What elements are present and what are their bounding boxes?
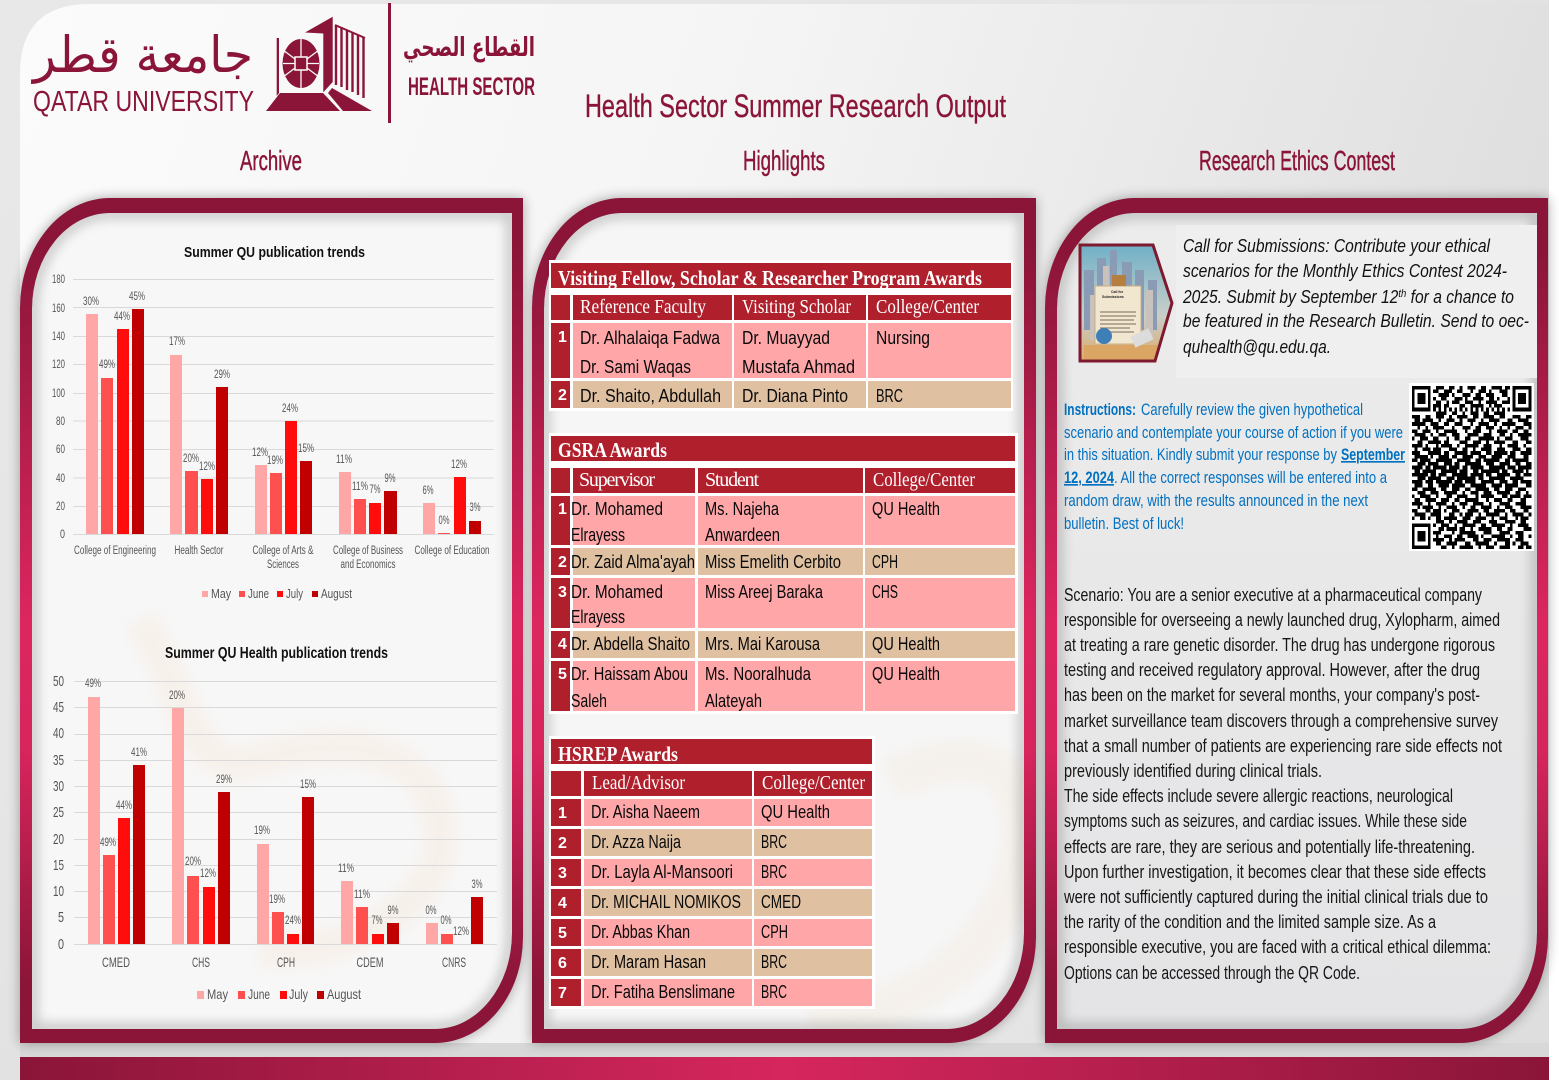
y axis labels: 0 <box>60 527 65 541</box>
table header: Visiting Scholar <box>742 296 851 318</box>
data labels: 24% <box>282 401 298 415</box>
bars: May <box>86 314 435 534</box>
y axis labels: 45 <box>53 699 64 716</box>
data labels: 12% <box>252 445 268 459</box>
table row 1: Dr. Alhalaiqa Fadwa <box>580 328 721 348</box>
y axis labels: 25 <box>53 804 64 821</box>
data labels: 45% <box>129 289 145 303</box>
text: scenario: The side effects include severe allergic reactions, neurological <box>1064 786 1453 806</box>
icon: call for submissions illustration <box>1080 245 1173 363</box>
table rows: Dr. Layla Al-Mansoori <box>591 862 733 882</box>
english health sector: HEALTH SECTOR <box>408 73 535 101</box>
text: instructions: Instructions: <box>1064 401 1136 419</box>
QR code <box>1409 383 1534 551</box>
table rows: QU Health <box>872 664 940 684</box>
heading: highlights: Highlights <box>743 145 825 176</box>
table rows: 4 <box>558 636 567 653</box>
y axis labels: 60 <box>56 442 65 456</box>
table title <box>551 739 872 766</box>
text: instructions: scenario and contemplate your course of action if you were <box>1064 424 1403 442</box>
data labels: 17% <box>169 334 185 348</box>
table row 2 <box>551 381 1011 408</box>
y axis labels: 180 <box>52 272 65 286</box>
chart title: Summer QU Health publication trends <box>165 645 388 662</box>
bars: August <box>133 765 483 944</box>
data labels: 19% <box>254 823 270 837</box>
y axis labels <box>53 673 64 953</box>
data labels: 29% <box>216 772 232 786</box>
category labels: Sciences <box>267 559 299 571</box>
legend: July <box>286 586 303 601</box>
table rows: Dr. Haissam Abou <box>571 664 688 684</box>
table rows: BRC <box>761 952 787 972</box>
data labels: 15% <box>298 441 314 455</box>
table rows: 7 <box>558 985 567 1002</box>
table header: Supervisor <box>579 469 655 491</box>
text: instructions <box>1064 401 1405 533</box>
legend: June <box>248 986 270 1002</box>
table rows: 6 <box>558 955 567 972</box>
text: instructions: bulletin. Best of luck! <box>1064 515 1184 533</box>
table rows: Dr. Mohamed <box>571 582 663 602</box>
y axis labels: 80 <box>56 414 65 428</box>
table row 2: 2 <box>558 387 567 404</box>
icon: call for submissions illustration: Submissions <box>1102 295 1124 299</box>
data labels: 19% <box>269 892 285 906</box>
table rows: Miss Emelith Cerbito <box>705 552 841 572</box>
table rows: Dr. Azza Naija <box>591 832 682 852</box>
table header: College/Center <box>762 772 865 794</box>
table rows: 4 <box>558 895 567 912</box>
table row 1: Mustafa Ahmad <box>742 357 855 377</box>
table rows: Dr. Maram Hasan <box>591 952 706 972</box>
y axis labels: 35 <box>53 752 64 769</box>
data labels: 11% <box>352 479 368 493</box>
category labels: CNRS <box>442 954 466 970</box>
data labels: 30% <box>83 294 99 308</box>
data labels: 7% <box>372 913 383 927</box>
data labels: 20% <box>183 451 199 465</box>
table header <box>551 468 1015 493</box>
table header: College/Center <box>876 296 979 318</box>
data labels: 11% <box>336 452 352 466</box>
call for submissions box <box>1176 225 1537 378</box>
text: call for submissions <box>1182 236 1529 357</box>
table rows: Dr. Fatiha Benslimane <box>591 982 735 1002</box>
text: call for submissions: th <box>1398 288 1406 300</box>
table header: Reference Faculty <box>580 296 706 318</box>
table rows: Elrayess <box>571 525 625 545</box>
logo emblem <box>266 17 372 111</box>
table rows: Elrayess <box>571 607 625 627</box>
data labels: 19% <box>267 453 283 467</box>
y axis labels: 5 <box>58 909 64 926</box>
category labels: CMED <box>102 954 130 970</box>
bars: June <box>101 378 450 534</box>
data labels: 41% <box>131 745 147 759</box>
category labels <box>102 954 466 970</box>
data labels <box>85 676 483 938</box>
table: visiting fellow, scholar and researcher program awards <box>549 260 1013 411</box>
y axis labels: 40 <box>56 471 65 485</box>
y axis labels: 40 <box>53 725 64 742</box>
heading: archive: Archive <box>240 145 302 176</box>
data labels: 9% <box>388 903 399 917</box>
health sector label <box>403 33 535 101</box>
y axis labels: 100 <box>52 386 65 400</box>
legend: July <box>289 986 308 1002</box>
category labels: CPH <box>277 954 295 970</box>
text: scenario: Options can be accessed through the QR Code. <box>1064 963 1360 983</box>
table rows: BRC <box>761 982 787 1002</box>
table rows: 2 <box>558 554 567 571</box>
table rows: Ms. Najeha <box>705 499 780 519</box>
table rows: QU Health <box>872 499 940 519</box>
panel frame: archive <box>20 198 523 1043</box>
table rows: 3 <box>558 865 567 882</box>
table rows: Dr. Abbas Khan <box>591 922 690 942</box>
data labels: 6% <box>422 483 434 497</box>
table rows: Dr. MICHAIL NOMIKOS <box>591 892 741 912</box>
table rows: CMED <box>761 892 801 912</box>
table rows <box>551 496 1015 711</box>
category labels: College of Arts & <box>252 545 314 557</box>
text: instructions: random draw, with the results announced in the next <box>1064 492 1368 510</box>
table rows: QU Health <box>761 802 830 822</box>
text: instructions: . All the correct responses will be entered into a <box>1114 469 1388 487</box>
y axis labels: 140 <box>52 329 65 343</box>
data labels: 3% <box>472 877 483 891</box>
table row 1: Nursing <box>876 328 930 348</box>
text: call for submissions: quhealth@qu.edu.qa. <box>1183 337 1331 357</box>
bars: July <box>117 329 466 534</box>
y axis labels: 20 <box>53 831 64 848</box>
table row 1: Dr. Muayyad <box>742 328 830 348</box>
table header: Lead/Advisor <box>592 772 685 794</box>
table row 2: BRC <box>876 386 903 406</box>
category labels: College of Business <box>333 545 403 557</box>
data labels: 0% <box>426 903 437 917</box>
category labels <box>74 545 490 571</box>
table rows: Dr. Abdella Shaito <box>571 634 690 654</box>
table rows: BRC <box>761 862 787 882</box>
table title: Visiting Fellow, Scholar & Researcher Program Awards <box>558 266 982 290</box>
table rows: 1 <box>558 501 567 518</box>
bars: May <box>88 697 438 944</box>
logo english wordmark: QATAR UNIVERSITY <box>33 86 254 118</box>
text: call for submissions: 2025. Submit by September 12 <box>1183 287 1431 307</box>
y axis labels: 30 <box>53 778 64 795</box>
y axis labels: 15 <box>53 857 64 874</box>
chart: summer QU health publication trends <box>53 645 497 1002</box>
table rows: Mrs. Mai Karousa <box>705 634 821 654</box>
data labels: 12% <box>199 459 215 473</box>
data labels: 49% <box>100 835 116 849</box>
table header <box>551 295 1011 320</box>
table rows: QU Health <box>872 634 940 654</box>
y axis labels: 0 <box>58 936 64 953</box>
y axis labels: 120 <box>52 357 65 371</box>
table rows: 3 <box>558 584 567 601</box>
text: call for submissions: Call for Submissions: Contribute your ethical <box>1183 236 1491 256</box>
table: GSRA awards <box>549 433 1018 714</box>
text: scenario: effects are rare, they are serious and potentially life-threatening. <box>1064 837 1475 857</box>
table rows: 1 <box>558 805 567 822</box>
icon: call for submissions illustration: Call for <box>1111 290 1124 294</box>
title: Health Sector Summer Research Output <box>585 88 1006 124</box>
table header <box>551 771 872 796</box>
legend <box>202 586 352 601</box>
category labels: CHS <box>192 954 210 970</box>
table rows: Dr. Mohamed <box>571 499 663 519</box>
table row 1: 1 <box>558 329 567 346</box>
data labels: 29% <box>214 367 230 381</box>
table rows: Alateyah <box>705 691 762 711</box>
table rows: 5 <box>558 925 567 942</box>
y axis labels <box>52 272 65 541</box>
table title: GSRA Awards <box>558 438 667 462</box>
table rows: CPH <box>872 552 898 572</box>
y axis labels: 50 <box>53 673 64 690</box>
legend: August <box>327 986 361 1002</box>
category labels: and Economics <box>340 559 396 571</box>
data labels: 12% <box>200 866 216 880</box>
data labels: 0% <box>438 513 450 527</box>
table rows: Saleh <box>571 691 607 711</box>
table header: Student <box>705 469 759 491</box>
text: scenario: the rarity of the condition and the limited sample size. As a <box>1064 912 1437 932</box>
legend: May <box>207 986 228 1002</box>
category labels: College of Education <box>414 545 490 557</box>
heading: research ethics contest: Research Ethics Contest <box>1199 145 1395 176</box>
data labels: 12% <box>453 924 469 938</box>
chart: summer QU publication trends <box>52 244 494 601</box>
table rows: 2 <box>558 835 567 852</box>
y axis labels: 10 <box>53 883 64 900</box>
text: call for submissions: for a chance to <box>1406 287 1514 307</box>
legend: June <box>248 586 269 601</box>
table rows: Dr. Zaid Alma'ayah <box>571 552 695 572</box>
text: instructions: Carefully review the given hypothetical <box>1141 401 1363 419</box>
legend: August <box>321 586 352 601</box>
category labels: Health Sector <box>174 545 224 557</box>
chart title: Summer QU publication trends <box>184 244 365 261</box>
text: instructions: 12, 2024 <box>1064 469 1115 487</box>
data labels: 12% <box>451 457 467 471</box>
data labels: 44% <box>114 309 130 323</box>
data labels: 49% <box>99 357 115 371</box>
arabic health sector: القطاع الصحي <box>403 33 535 63</box>
text: instructions: in this situation. Kindly submit your response by <box>1064 446 1338 464</box>
category labels: College of Engineering <box>74 545 156 557</box>
table rows: Dr. Aisha Naeem <box>591 802 700 822</box>
table rows: CPH <box>761 922 788 942</box>
table rows: Miss Areej Baraka <box>705 582 824 602</box>
bottom bar <box>20 1057 1549 1080</box>
table row 1: Dr. Sami Waqas <box>580 357 691 377</box>
table row 2: Dr. Shaito, Abdullah <box>580 386 721 406</box>
category labels: CDEM <box>356 954 384 970</box>
QR finder patterns <box>1412 386 1531 549</box>
table row 1 <box>551 323 1011 378</box>
data labels: 11% <box>338 861 354 875</box>
y axis labels: 20 <box>56 499 65 513</box>
panel frame: highlights <box>532 198 1036 1043</box>
data labels: 0% <box>440 913 452 927</box>
bars: June <box>103 855 453 944</box>
data labels: 20% <box>169 688 185 702</box>
table rows: CHS <box>872 582 898 602</box>
data labels: 9% <box>384 471 396 485</box>
table rows: BRC <box>761 832 787 852</box>
data labels: 49% <box>85 676 101 690</box>
logo arabic wordmark: جامعة قطر <box>30 26 253 84</box>
table rows: Ms. Nooralhuda <box>705 664 812 684</box>
table row 2: Dr. Diana Pinto <box>742 386 848 406</box>
bars: July <box>118 818 384 944</box>
text: instructions: September <box>1341 446 1405 464</box>
data labels: 3% <box>470 500 481 514</box>
table rows: Anwardeen <box>705 525 780 545</box>
data labels: 44% <box>116 798 132 812</box>
data labels: 24% <box>285 913 301 927</box>
data labels: 20% <box>185 854 201 868</box>
data labels <box>83 289 481 527</box>
table: HSREP awards <box>549 736 875 1009</box>
y axis labels: 160 <box>52 301 65 315</box>
divider <box>388 3 391 123</box>
data labels: 11% <box>354 887 370 901</box>
text: scenario <box>1063 585 1502 983</box>
table title: HSREP Awards <box>558 742 678 766</box>
data labels: 7% <box>370 482 381 496</box>
data labels: 15% <box>300 777 316 791</box>
table rows: 5 <box>558 666 567 683</box>
table rows <box>551 799 872 1006</box>
logo: Qatar University <box>30 17 372 118</box>
table title <box>551 436 1015 462</box>
legend <box>197 986 361 1002</box>
bars: August <box>132 309 481 534</box>
table header: College/Center <box>873 469 975 491</box>
text: scenario: previously identified during clinical trials. <box>1064 761 1322 781</box>
panel frame: research ethics contest <box>1045 198 1548 1043</box>
legend: May <box>211 586 231 601</box>
text: call for submissions: scenarios for the Monthly Ethics Contest 2024- <box>1183 261 1507 281</box>
